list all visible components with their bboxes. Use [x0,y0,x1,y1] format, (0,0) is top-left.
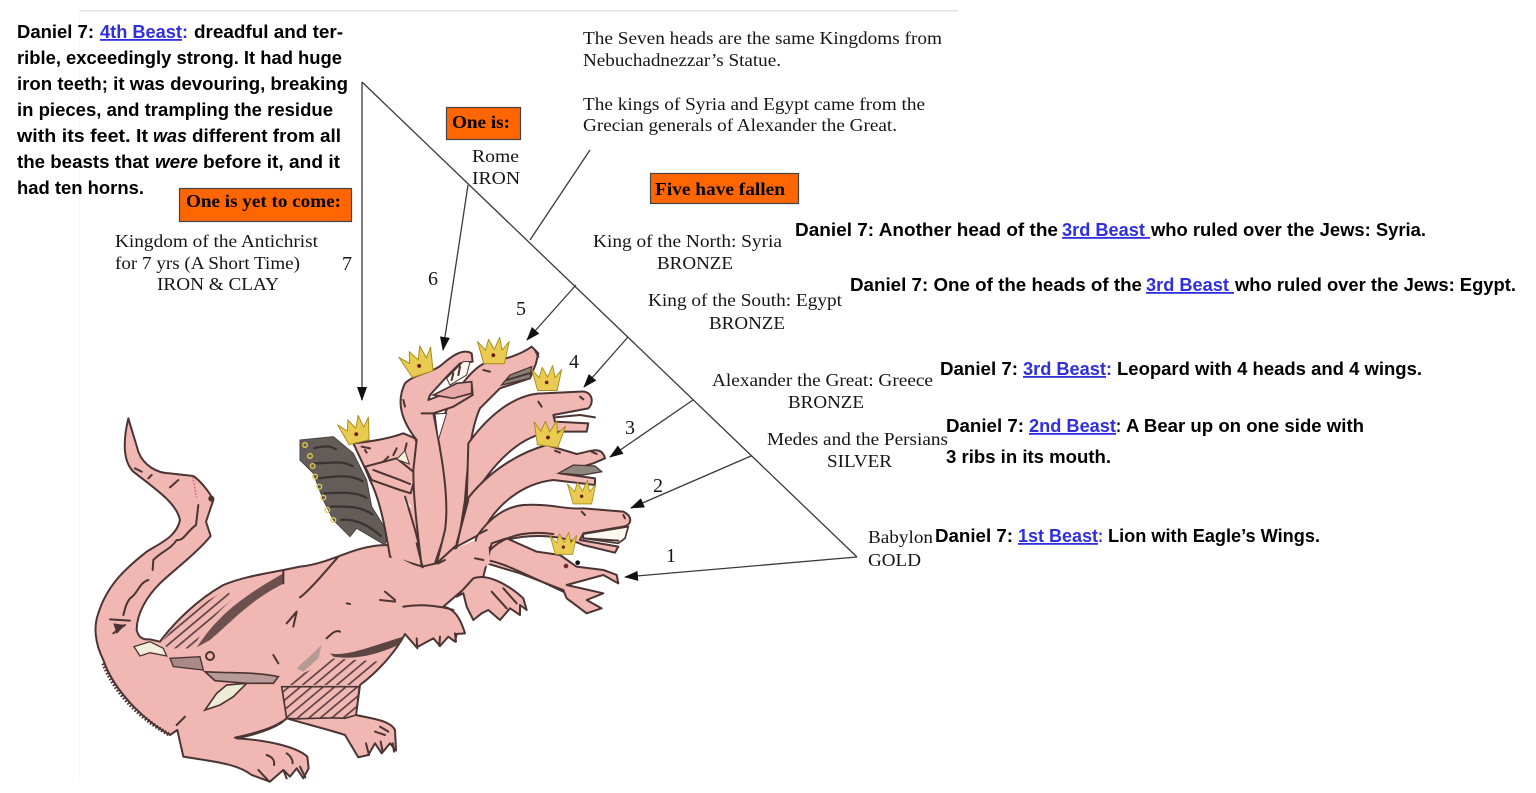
lower wing hatching [283,658,380,685]
text: 4th beast description: dreadful and ter- [194,22,343,42]
annotation: Syria: 3rd Beast [1062,220,1150,240]
annotation: 2nd beast: 3 ribs in its mouth. [946,447,1111,467]
kingdom: Greece: Alexander the Great: Greece [712,370,933,390]
arrow 4 [584,337,628,387]
text: 4th beast description: were [155,152,198,172]
kingdom: Egypt: King of the South: Egypt [648,290,842,310]
kingdom: Antichrist: Kingdom of the Antichrist [115,231,318,251]
annotation: Syria: who ruled over the Jews: Syria. [1150,220,1426,240]
annotation: 1st beast: Daniel 7: [935,526,1013,546]
rear claws [258,633,456,782]
text: 4th beast description: before it, and it [203,152,340,172]
text: 4th beast description: 4th Beast [100,22,182,42]
note: seven heads: The kings of Syria and Egypt came from the [583,94,925,114]
kingdom: Babylon: Babylon [868,527,933,547]
rear leg hatching [282,687,359,719]
arrow 2 [631,456,751,508]
illustration: seven-headed beast [96,337,630,782]
annotation: 2nd beast: 2nd Beast [1029,416,1116,436]
arrow numbers: 2 [653,475,663,497]
text: 4th beast description: Daniel 7: [17,22,94,42]
crowns [337,337,596,554]
kingdom: Syria [593,231,782,273]
kingdom: Egypt: BRONZE [709,313,785,333]
annotation: 1st beast: 1st Beast [1018,526,1098,546]
annotation: 2nd beast: : [1116,416,1121,436]
diagram lines [362,82,857,577]
kingdom: Persia [767,429,948,471]
neck and head 6 [401,352,473,567]
kingdom: Persia: Medes and the Persians [767,429,948,449]
kingdom: Rome [472,146,520,188]
note: seven heads [583,28,942,135]
text: 4th beast description: rible, exceedingly strong. It had huge [17,48,342,68]
note: seven heads: The Seven heads are the same Kingdoms from [583,28,942,48]
kingdom: Rome: Rome [472,146,519,166]
note: seven heads: Grecian generals of Alexander the Great. [583,115,897,135]
label: five have fallen: Five have fallen [655,179,785,199]
kingdom: Antichrist [115,231,318,294]
arrow 6 [443,185,468,350]
annotation: 2nd beast: A Bear up on one side with [1126,416,1364,436]
annotation: 3rd beast: 3rd Beast [1023,359,1106,379]
arrow 1 [625,557,857,577]
arrow numbers: 6 [428,268,438,290]
arrow 5 [527,285,576,340]
text: 4th beast description: iron teeth; it was devouring, breaking [17,74,348,94]
kingdom: Syria: King of the North: Syria [593,231,782,251]
label: one is: One is: [452,112,510,132]
text: 4th beast description: had ten horns. [17,178,144,198]
annotation: 2nd beast: Daniel 7: [946,416,1024,436]
connector to note [530,150,590,240]
neck and head 2 [470,505,630,563]
tail ridge [110,468,198,633]
annotation: Egypt [850,275,1516,295]
label: one is [446,108,520,140]
kingdom: Antichrist: IRON & CLAY [157,274,279,294]
kingdom: Antichrist: for 7 yrs (A Short Time) [115,253,300,274]
arrow numbers: 4 [569,351,579,373]
main diagonal [362,82,857,557]
kingdom: Egypt [648,290,842,333]
annotation: 3rd beast: Daniel 7: [940,359,1018,379]
heads and necks [300,337,630,620]
arrow numbers: 5 [516,298,526,320]
arrow numbers [342,253,676,567]
annotation: 2nd beast [946,416,1364,467]
text: 4th beast description [16,22,348,198]
neck base blend [390,541,490,597]
kingdom: Babylon: GOLD [868,550,921,570]
kingdom: Syria: BRONZE [657,253,733,273]
kingdom: Rome: IRON [472,168,520,188]
head 7 [353,433,423,567]
kingdom: Babylon [868,527,933,570]
annotation: Egypt: who ruled over the Jews: Egypt. [1234,275,1516,295]
arrow numbers: 1 [666,545,676,567]
text: 4th beast description: in pieces, and trampling the residue [17,100,333,120]
wing dark patches [197,573,284,647]
neck base lines [417,500,487,567]
cream patches [134,642,167,656]
annotation: Syria [795,220,1426,240]
kingdom: Persia: SILVER [827,451,892,471]
text: 4th beast description: different from all [192,126,341,146]
kingdom: Greece [712,370,933,412]
annotation: Egypt: Daniel 7: One of the heads of the [850,275,1142,295]
annotation: 3rd beast: : [1106,359,1112,379]
arrow 3 [610,400,693,457]
neck and head 3 [457,445,605,547]
arrow numbers: 3 [625,417,635,439]
annotation: 3rd beast: Leopard with 4 heads and 4 wings. [1117,359,1422,379]
arrow 7 [361,82,363,400]
neck and head 1 [483,533,618,613]
body detail lines [177,557,453,765]
kingdom: Greece: BRONZE [788,392,864,412]
text: 4th beast description: the beasts that [17,152,149,172]
annotation: Syria: Daniel 7: Another head of the [795,220,1058,240]
note: seven heads: Nebuchadnezzar’s Statue. [583,50,781,70]
mane of head 7 [300,437,388,545]
annotation: 1st beast: Lion with Eagle’s Wings. [1108,526,1320,546]
right foreleg [457,577,527,620]
upper wing hatching [163,590,233,648]
label: five have fallen [650,174,798,204]
text: 4th beast description: was [153,126,187,146]
neck and head 4 [467,392,595,503]
text: 4th beast description: : [182,22,188,42]
annotation: 1st beast [935,526,1320,546]
annotation: 1st beast: : [1098,526,1103,546]
text: 4th beast description: with its feet. It [16,126,148,146]
arrow numbers: 7 [342,253,352,275]
annotation: Egypt: 3rd Beast [1146,275,1234,295]
neck and head 5 [437,347,538,563]
beast body and tail [96,418,490,782]
label: one is yet to come [180,188,352,222]
annotation: 3rd beast [940,359,1422,379]
label: one is yet to come: One is yet to come: [186,191,341,211]
